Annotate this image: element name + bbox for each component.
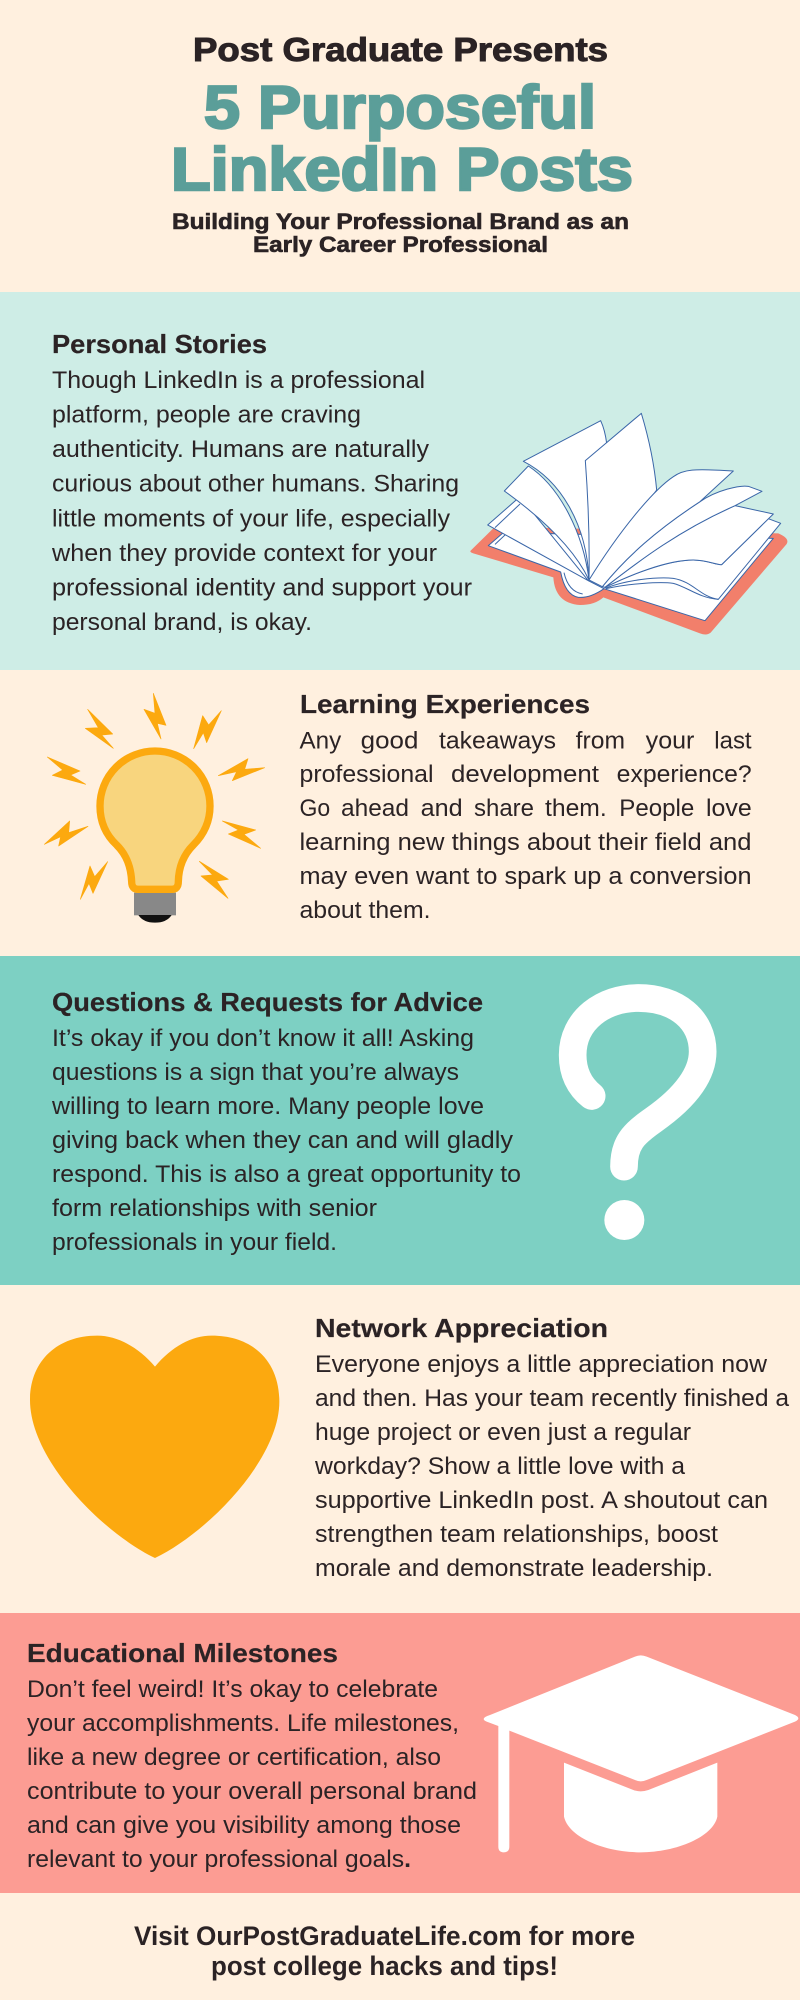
icon: heart	[30, 1336, 279, 1558]
text block: learning experiences: Go	[300, 795, 330, 822]
text block: personal stories: authenticity. Humans are naturally	[52, 436, 429, 463]
text block: network appreciation: huge project or even just a regular	[315, 1419, 691, 1446]
lightning bolts	[44, 693, 265, 899]
panel: network appreciation	[30, 1313, 790, 1582]
text block: learning experiences: from	[576, 728, 625, 754]
text block: educational milestones	[27, 1676, 477, 1873]
text block: questions: giving back when they can and will gladly	[52, 1127, 513, 1154]
text block: educational milestones: your accomplishments. Life milestones,	[27, 1710, 459, 1737]
text block: learning experiences	[300, 728, 752, 924]
text block: learning experiences: love	[706, 795, 752, 822]
subtitle	[172, 209, 629, 257]
footer call to action: Visit OurPostGraduateLife.com for more	[134, 1921, 635, 1951]
text block: learning experiences: Any	[300, 728, 341, 754]
text block: learning experiences: ahead	[341, 795, 409, 822]
main title	[171, 74, 633, 203]
text block: personal stories: professional identity and support your	[52, 574, 472, 602]
text block: educational milestones: relevant to your professional goals .	[27, 1846, 411, 1873]
text block: personal stories: personal brand, is okay.	[52, 609, 312, 636]
text block: learning experiences: takeaways	[439, 728, 556, 754]
text block: network appreciation: Everyone enjoys a little appreciation now	[315, 1351, 768, 1378]
heading: learning experiences: Learning Experiences	[300, 689, 590, 719]
panel: questions and requests for advice	[0, 956, 800, 1285]
main title: LinkedIn Posts	[171, 136, 633, 203]
text block: learning experiences: your	[646, 728, 694, 754]
text block: network appreciation: workday? Show a little love with a	[314, 1453, 686, 1480]
footer call to action: post college hacks and tips!	[211, 1951, 558, 1981]
heading: personal stories: Personal Stories	[52, 329, 267, 359]
text block: questions: form relationships with senior	[52, 1195, 377, 1222]
main title: 5 Purposeful	[204, 74, 596, 141]
text block: questions: It’s okay if you don’t know it all! Asking	[52, 1025, 474, 1052]
text block: learning experiences: learning new things about their field and	[300, 829, 752, 856]
text block: learning experiences: them.	[545, 795, 607, 822]
text block: network appreciation: and then. Has your team recently finished a	[315, 1385, 790, 1412]
text block: questions: willing to learn more. Many people love	[51, 1093, 484, 1120]
presenter line: Post Graduate Presents	[193, 32, 608, 69]
subtitle: Early Career Professional	[253, 232, 548, 257]
heading: educational milestones: Educational Milestones	[27, 1638, 338, 1668]
icon: graduation cap	[484, 1655, 798, 1852]
text block: learning experiences: share	[474, 795, 534, 822]
panel: educational milestones	[0, 1613, 800, 1893]
text block: learning experiences: experience?	[617, 761, 752, 788]
text block: questions: respond. This is also a great opportunity to	[52, 1161, 521, 1188]
text block: learning experiences: about them.	[300, 897, 430, 924]
text block: personal stories: platform, people are craving	[52, 402, 361, 428]
text block: personal stories: Though LinkedIn is a professional	[52, 367, 425, 394]
text block: network appreciation: morale and demonstrate leadership.	[315, 1555, 713, 1582]
heading: network appreciation: Network Appreciation	[315, 1313, 608, 1343]
text block: personal stories: curious about other humans. Sharing	[52, 470, 459, 498]
bulb base	[134, 893, 176, 915]
text block: learning experiences: professional	[300, 761, 434, 788]
icon: question mark	[573, 998, 703, 1240]
icon: light bulb	[44, 693, 265, 923]
text block: learning experiences: last	[714, 728, 752, 754]
text block: educational milestones: like a new degree or certification, also	[27, 1744, 441, 1771]
text block: educational milestones: contribute to your overall personal brand	[27, 1778, 477, 1805]
text block: educational milestones: and can give you visibility among those	[27, 1812, 461, 1839]
panel: learning experiences	[44, 689, 752, 924]
text block: network appreciation: supportive LinkedIn post. A shoutout can	[315, 1487, 768, 1514]
bulb glass	[100, 751, 210, 889]
text block: educational milestones: Don’t feel weird! It’s okay to celebrate	[27, 1676, 438, 1703]
text block: personal stories: when they provide context for your	[51, 540, 437, 567]
text block: questions: questions is a sign that you’re always	[52, 1059, 459, 1086]
text block: learning experiences: good	[361, 728, 418, 754]
text block: personal stories: little moments of your life, especially	[52, 506, 450, 532]
title block	[171, 32, 633, 257]
footer call to action	[134, 1921, 635, 1981]
icon: open book	[470, 413, 787, 635]
text block: questions	[51, 1025, 521, 1256]
text block: learning experiences: development	[451, 761, 599, 788]
text block: personal stories	[51, 367, 472, 636]
panel: personal stories	[0, 292, 800, 670]
text block: network appreciation	[314, 1351, 790, 1582]
text block: questions: professionals in your field.	[52, 1229, 337, 1256]
subtitle: Building Your Professional Brand as an	[172, 209, 629, 234]
text block: learning experiences: and	[421, 795, 463, 822]
text block: learning experiences: People	[619, 795, 694, 822]
heading: questions: Questions & Requests for Advice	[52, 987, 483, 1017]
text block: learning experiences: may even want to spark up a conversion	[300, 863, 752, 890]
text block: network appreciation: strengthen team relationships, boost	[315, 1521, 718, 1548]
